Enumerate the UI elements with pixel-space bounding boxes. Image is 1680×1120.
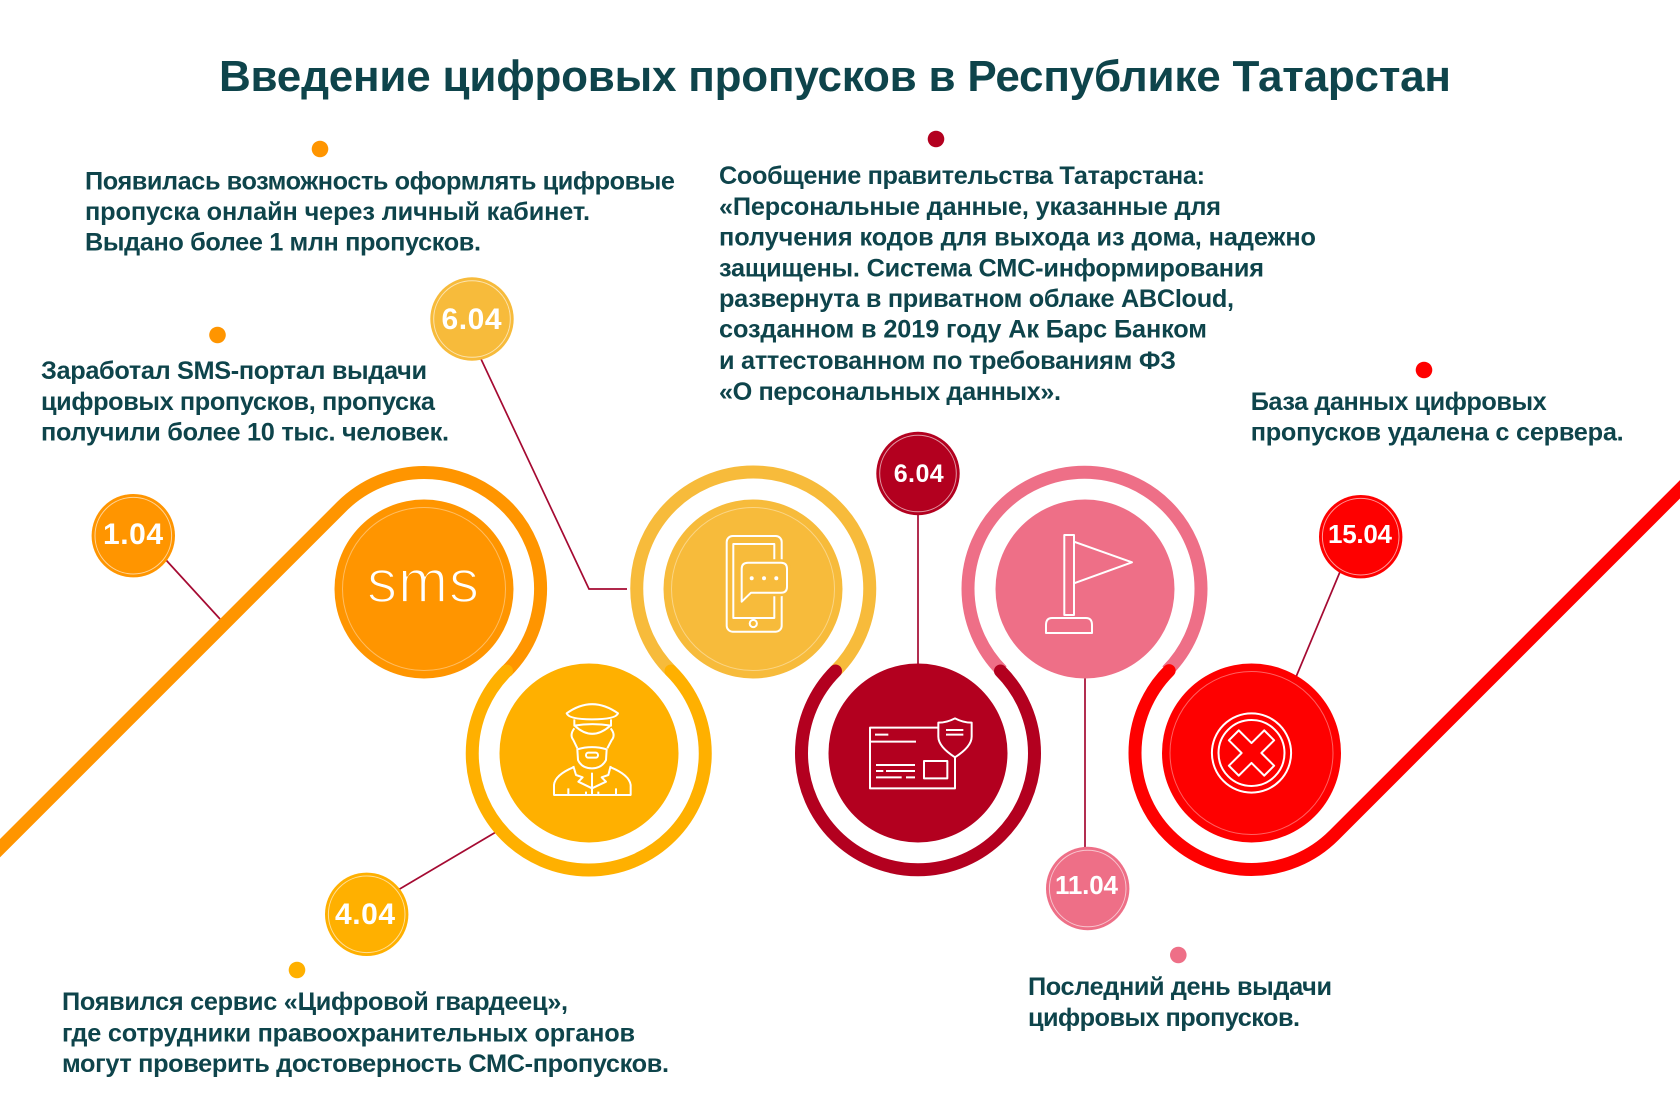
text block: sms portal: получили более 10 тыс. человек.: [41, 419, 449, 447]
text block: government statement: развернута в приватном облаке ABCloud,: [719, 285, 1234, 313]
text block: digital guard service: [62, 988, 669, 1078]
date badge: 1.04: 1.04: [103, 518, 163, 551]
date badge: 15.04: [1319, 495, 1402, 578]
text block: digital guard service: где сотрудники правоохранительных органов: [62, 1020, 635, 1048]
date badge: 6.04 yellow: 6.04: [442, 303, 502, 336]
text block: digital guard service: Появился сервис «Цифровой гвардеец»,: [62, 988, 568, 1016]
text block: last day: [1028, 973, 1332, 1032]
date badge: 4.04: [325, 873, 408, 956]
connector: 1.04: [166, 560, 220, 619]
text block: last day: Последний день выдачи: [1028, 973, 1332, 1001]
text block: online passes: [85, 167, 675, 257]
date badge: 11.04: 11.04: [1055, 870, 1119, 900]
icon: flag: [1046, 535, 1132, 633]
bullet: text 5: [289, 962, 305, 978]
bullet: text 1: [312, 141, 328, 157]
bullet: text 2: [209, 327, 226, 343]
connector: 4.04: [398, 832, 496, 890]
flag circle: [996, 500, 1174, 678]
connector: 6.04 mail: [917, 512, 919, 666]
text block: online passes: Выдано более 1 млн пропусков.: [85, 229, 481, 257]
date badge: 1.04: [92, 494, 175, 577]
date badge: 4.04: 4.04: [335, 898, 395, 931]
title: Введение цифровых пропусков в Республике Татарстан: [219, 52, 1451, 101]
text block: government statement: «Персональные данные, указанные для: [719, 193, 1221, 221]
icon: phone with chat bubble: [727, 536, 787, 632]
date badge: 6.04 yellow: [430, 277, 514, 361]
ribbon segment: red: [1135, 469, 1680, 870]
text block: database removed: [1251, 388, 1624, 447]
text block: online passes: пропуска онлайн через личный кабинет.: [85, 198, 590, 226]
text block: digital guard service: могут проверить достоверность СМС-пропусков.: [62, 1050, 669, 1078]
text block: online passes: Появилась возможность оформлять цифровые: [85, 167, 675, 195]
ribbon segment: sms orange: [0, 472, 541, 858]
icon: sms word: sms: [367, 548, 479, 615]
text block: government statement: защищены. Система СМС-информирования: [719, 255, 1264, 283]
text block: government statement: и аттестованном по требованиям ФЗ: [719, 347, 1176, 375]
sms circle: [334, 500, 514, 678]
connector: 15.04: [1296, 567, 1342, 677]
text block: government statement: получения кодов для выхода из дома, надежно: [719, 224, 1316, 252]
ribbon segment: phone yellow: [637, 472, 870, 671]
mail circle: [828, 664, 1008, 842]
text block: database removed: База данных цифровых: [1251, 388, 1547, 416]
text block: sms portal: цифровых пропусков, пропуска: [41, 388, 436, 416]
connector: 11.04: [1084, 676, 1086, 850]
guard circle: [500, 664, 678, 842]
text block: sms portal: Заработал SMS-портал выдачи: [41, 357, 427, 385]
phone circle: [664, 500, 842, 678]
date badge: 11.04: [1046, 847, 1129, 930]
icon: officer: [553, 704, 631, 795]
connector: 6.04 phone: [481, 359, 627, 589]
connector lines: [166, 359, 1342, 890]
text block: government statement: [719, 162, 1316, 406]
text block: sms portal: [41, 357, 449, 447]
text block: government statement: «О персональных данных».: [719, 378, 1061, 406]
ribbon segment: guard amber: [472, 671, 705, 870]
icon: cross in circle: [1212, 713, 1291, 793]
text block: last day: цифровых пропусков.: [1028, 1004, 1300, 1032]
timeline ribbon: [0, 469, 1680, 870]
text block: government statement: созданном в 2019 году Ак Барс Банком: [719, 316, 1207, 344]
date badge: 6.04 crimson: 6.04: [894, 460, 944, 488]
bullet: text 4: [1416, 362, 1432, 378]
bullet: text 3: [928, 131, 944, 147]
delete circle: [1162, 664, 1341, 842]
icon: envelope with shield: [870, 718, 972, 788]
date badge: 6.04 crimson: [876, 432, 960, 515]
text block: database removed: пропусков удалена с сервера.: [1251, 419, 1624, 447]
bullet: text 6: [1170, 947, 1187, 963]
date badge: 15.04: 15.04: [1328, 519, 1393, 549]
text block: government statement: Сообщение правительства Татарстана:: [719, 162, 1205, 190]
ribbon segment: flag pink: [968, 472, 1201, 671]
ribbon segment: mail crimson: [802, 671, 1034, 870]
